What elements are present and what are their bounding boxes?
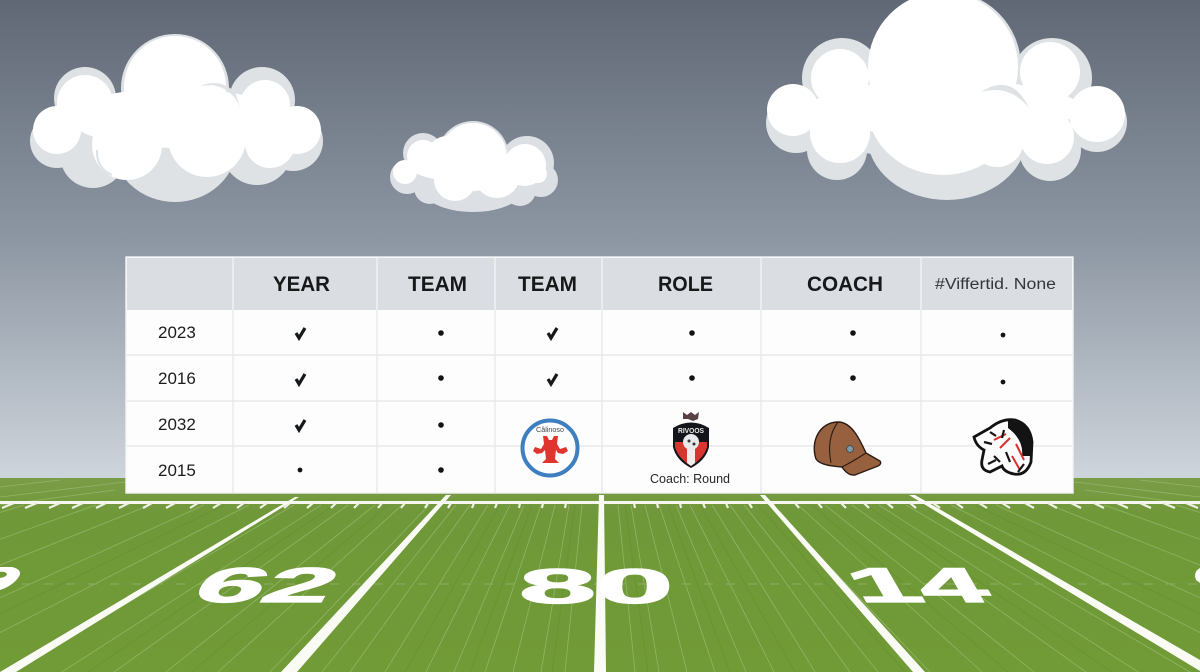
field number: 80: 80 bbox=[519, 559, 673, 614]
yard line: outer left bbox=[0, 497, 299, 672]
cloud: left bbox=[30, 34, 323, 202]
header labels: ROLE bbox=[658, 272, 713, 296]
cloud: right bbox=[766, 0, 1127, 200]
icon: crest with caption bbox=[650, 412, 730, 486]
check marks bbox=[296, 328, 557, 430]
dot marks bbox=[298, 330, 1005, 473]
icon: mascot head bbox=[974, 420, 1032, 474]
table header band bbox=[127, 258, 1072, 310]
field number: 14: 14 bbox=[835, 558, 1001, 613]
header labels: TEAM bbox=[518, 272, 577, 296]
midfield dashed line bbox=[0, 583, 1200, 585]
yard line: centre bbox=[594, 495, 606, 672]
year labels: 2016 bbox=[158, 369, 196, 388]
hash marks bbox=[2, 503, 1198, 508]
header labels: COACH bbox=[807, 272, 883, 296]
yard line: inner left bbox=[281, 495, 451, 672]
data table bbox=[126, 257, 1073, 493]
cloud: centre bbox=[390, 121, 558, 212]
year labels: 2023 bbox=[158, 323, 196, 342]
horizontal boundary line bbox=[0, 501, 1200, 504]
table grid bbox=[127, 310, 1072, 493]
football field bbox=[0, 478, 1200, 672]
header labels: #Viffertid. None bbox=[935, 276, 1056, 293]
field number: 62: 62 bbox=[183, 558, 350, 613]
sky background bbox=[0, 0, 1200, 480]
icon: round team badge: Câlinoso bbox=[536, 427, 564, 434]
grass stripes bbox=[0, 480, 1200, 672]
icon: brown cap bbox=[814, 422, 881, 475]
header labels: YEAR bbox=[273, 272, 330, 296]
header labels: TEAM bbox=[408, 272, 467, 296]
header labels bbox=[273, 272, 1056, 296]
year labels: 2032 bbox=[158, 415, 196, 434]
partial field number: left edge bbox=[0, 567, 20, 592]
partial field number: right edge bbox=[1195, 568, 1200, 583]
year labels: 2015 bbox=[158, 461, 196, 480]
icon: round team badge bbox=[522, 420, 578, 476]
icon: crest with caption: Coach: Round bbox=[650, 472, 730, 486]
year labels bbox=[158, 323, 196, 480]
icon: crest with caption: RIVOOS bbox=[678, 428, 704, 435]
yard line: inner right bbox=[760, 495, 925, 672]
yard line: outer right bbox=[909, 495, 1200, 671]
